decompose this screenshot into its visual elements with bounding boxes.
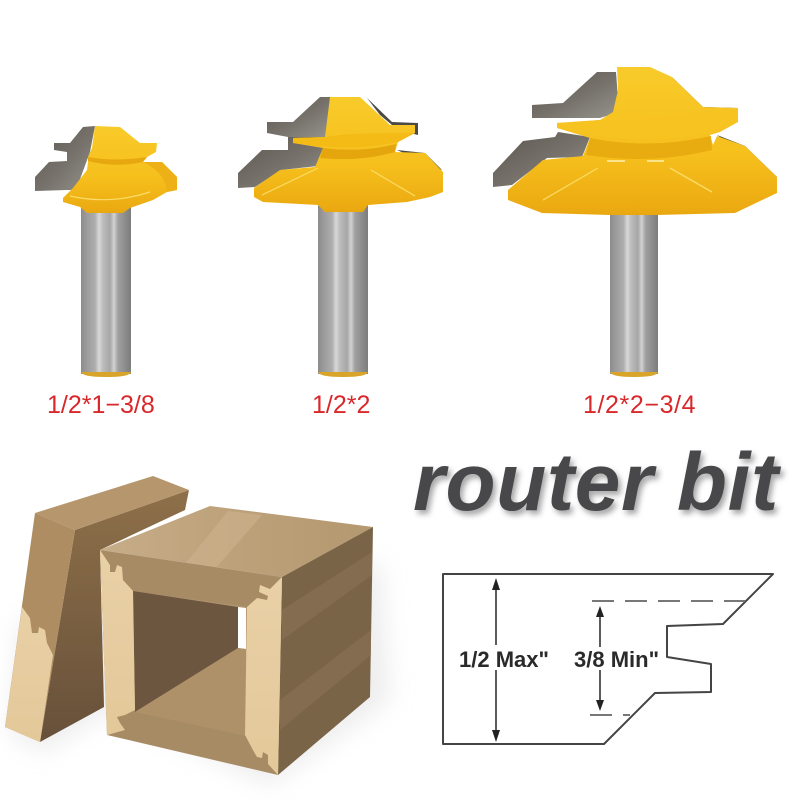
label: large bit size: 1/2*2−3/4 [583,391,696,419]
dashed guide lines [590,601,745,715]
arrow: min height [596,606,604,711]
diagram: cutter profile dimensions [443,574,773,744]
open cube [100,506,373,775]
leaning board [5,476,189,742]
profile outline [443,574,773,744]
title: router bit: router bit [413,437,782,528]
panel: router bits [35,67,777,377]
bit large [493,67,777,377]
arrow: max height [492,578,500,742]
label: small bit size: 1/2*1−3/8 [47,391,155,419]
illustration: wooden lock-miter box [5,476,390,785]
left post [100,550,135,735]
bit small [35,126,177,377]
right post [245,577,282,775]
label: medium bit size: 1/2*2 [312,391,370,419]
label: min: 3/8 Min" [574,647,659,672]
label: max: 1/2 Max" [459,647,549,672]
bit medium [238,97,443,377]
